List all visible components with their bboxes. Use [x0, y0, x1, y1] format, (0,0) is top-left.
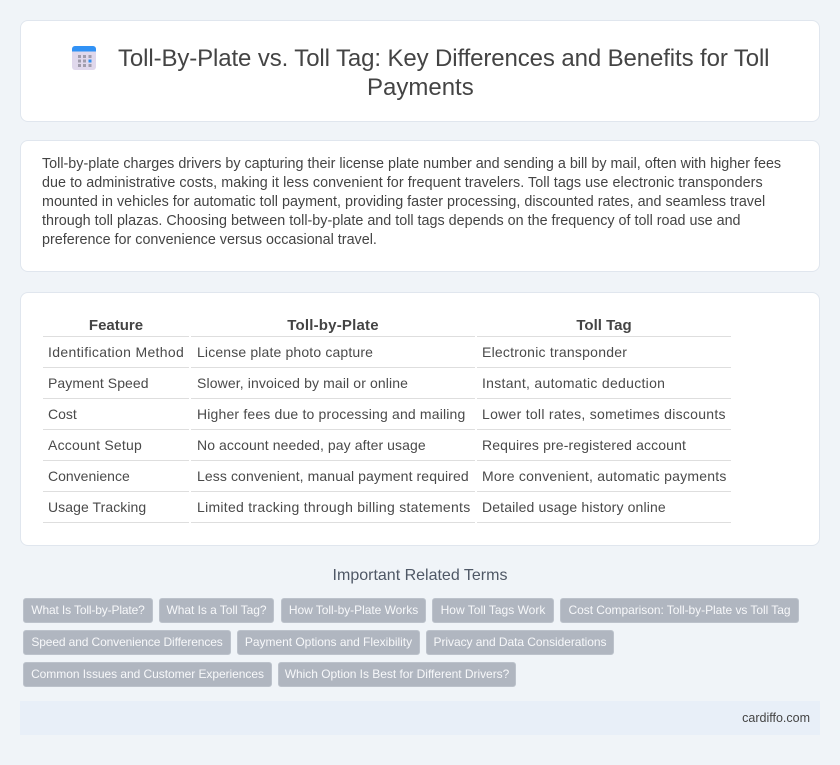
row: usage tracking: Usage Tracking	[48, 499, 146, 515]
row: account setup: Account Setup	[48, 437, 142, 453]
tag: How Toll Tags Work	[441, 603, 545, 617]
intro paragraph: through toll plazas. Choosing between toll-by-plate and toll tags depends on the frequency of toll road use and	[42, 213, 741, 229]
row: usage tracking: Limited tracking through billing statements	[197, 499, 471, 515]
intro text panel	[20, 140, 820, 272]
row: identification method: Identification Method	[48, 344, 184, 360]
row: convenience: Less convenient, manual payment required	[197, 468, 469, 484]
tag	[432, 598, 554, 623]
row: cost	[48, 406, 726, 422]
row: account setup	[48, 437, 686, 453]
tag	[23, 598, 153, 623]
tag	[159, 598, 274, 623]
row: payment speed: Payment Speed	[48, 375, 149, 391]
intro paragraph: due to administrative costs, making it less convenient for frequent travelers. Toll tags use electronic transponders	[42, 175, 763, 191]
tag	[23, 662, 272, 687]
intro paragraph	[42, 156, 781, 248]
footer credit: cardiffo.com	[742, 711, 810, 725]
tag: Privacy and Data Considerations	[434, 635, 606, 649]
tag	[281, 598, 426, 623]
intro paragraph: preference for convenience versus occasional travel.	[42, 232, 377, 248]
row: payment speed	[48, 375, 665, 391]
related terms tags	[23, 598, 799, 687]
row: identification method: Electronic transponder	[482, 344, 627, 360]
row: payment speed: Instant, automatic deduction	[482, 375, 665, 391]
tag: Which Option Is Best for Different Drivers?	[285, 667, 509, 681]
tag: Common Issues and Customer Experiences	[31, 667, 264, 681]
tag: How Toll-by-Plate Works	[289, 603, 418, 617]
row: account setup: Requires pre-registered account	[482, 437, 686, 453]
tag	[23, 630, 231, 655]
intro paragraph: Toll-by-plate charges drivers by capturing their license plate number and sending a bill by mail, often with higher fees	[42, 156, 781, 172]
related terms heading: Important Related Terms	[333, 567, 507, 584]
tag	[278, 662, 516, 687]
icon: calendar	[72, 46, 96, 70]
row: account setup: No account needed, pay after usage	[197, 437, 426, 453]
row: convenience: Convenience	[48, 468, 130, 484]
comparison table panel	[20, 292, 820, 546]
tag: Payment Options and Flexibility	[245, 635, 412, 649]
table header row: Toll Tag	[576, 317, 632, 334]
tag	[560, 598, 799, 623]
row: usage tracking	[48, 499, 666, 515]
row: convenience: More convenient, automatic payments	[482, 468, 727, 484]
tag: Cost Comparison: Toll-by-Plate vs Toll Tag	[568, 603, 790, 617]
footer bar	[20, 701, 820, 735]
table header row: Toll-by-Plate	[287, 317, 379, 334]
row: cost: Higher fees due to processing and mailing	[197, 406, 465, 422]
tag: What Is a Toll Tag?	[166, 603, 266, 617]
row: identification method	[48, 344, 627, 360]
tag: What Is Toll-by-Plate?	[31, 603, 145, 617]
title	[118, 45, 769, 101]
intro paragraph: mounted in vehicles for automatic toll payment, providing faster processing, discounted rates, and seamless travel	[42, 194, 765, 210]
table header row: Feature	[89, 317, 143, 334]
row: cost: Cost	[48, 406, 77, 422]
row: payment speed: Slower, invoiced by mail or online	[197, 375, 408, 391]
row: identification method: License plate photo capture	[197, 344, 373, 360]
title: Payments	[367, 74, 474, 101]
row: usage tracking: Detailed usage history online	[482, 499, 666, 515]
tag	[237, 630, 420, 655]
header panel	[20, 20, 820, 122]
row: convenience	[48, 468, 727, 484]
tag: Speed and Convenience Differences	[31, 635, 223, 649]
title: Toll-By-Plate vs. Toll Tag: Key Differences and Benefits for Toll	[118, 45, 769, 72]
row: cost: Lower toll rates, sometimes discounts	[482, 406, 726, 422]
table header row	[89, 317, 632, 334]
tag	[426, 630, 614, 655]
